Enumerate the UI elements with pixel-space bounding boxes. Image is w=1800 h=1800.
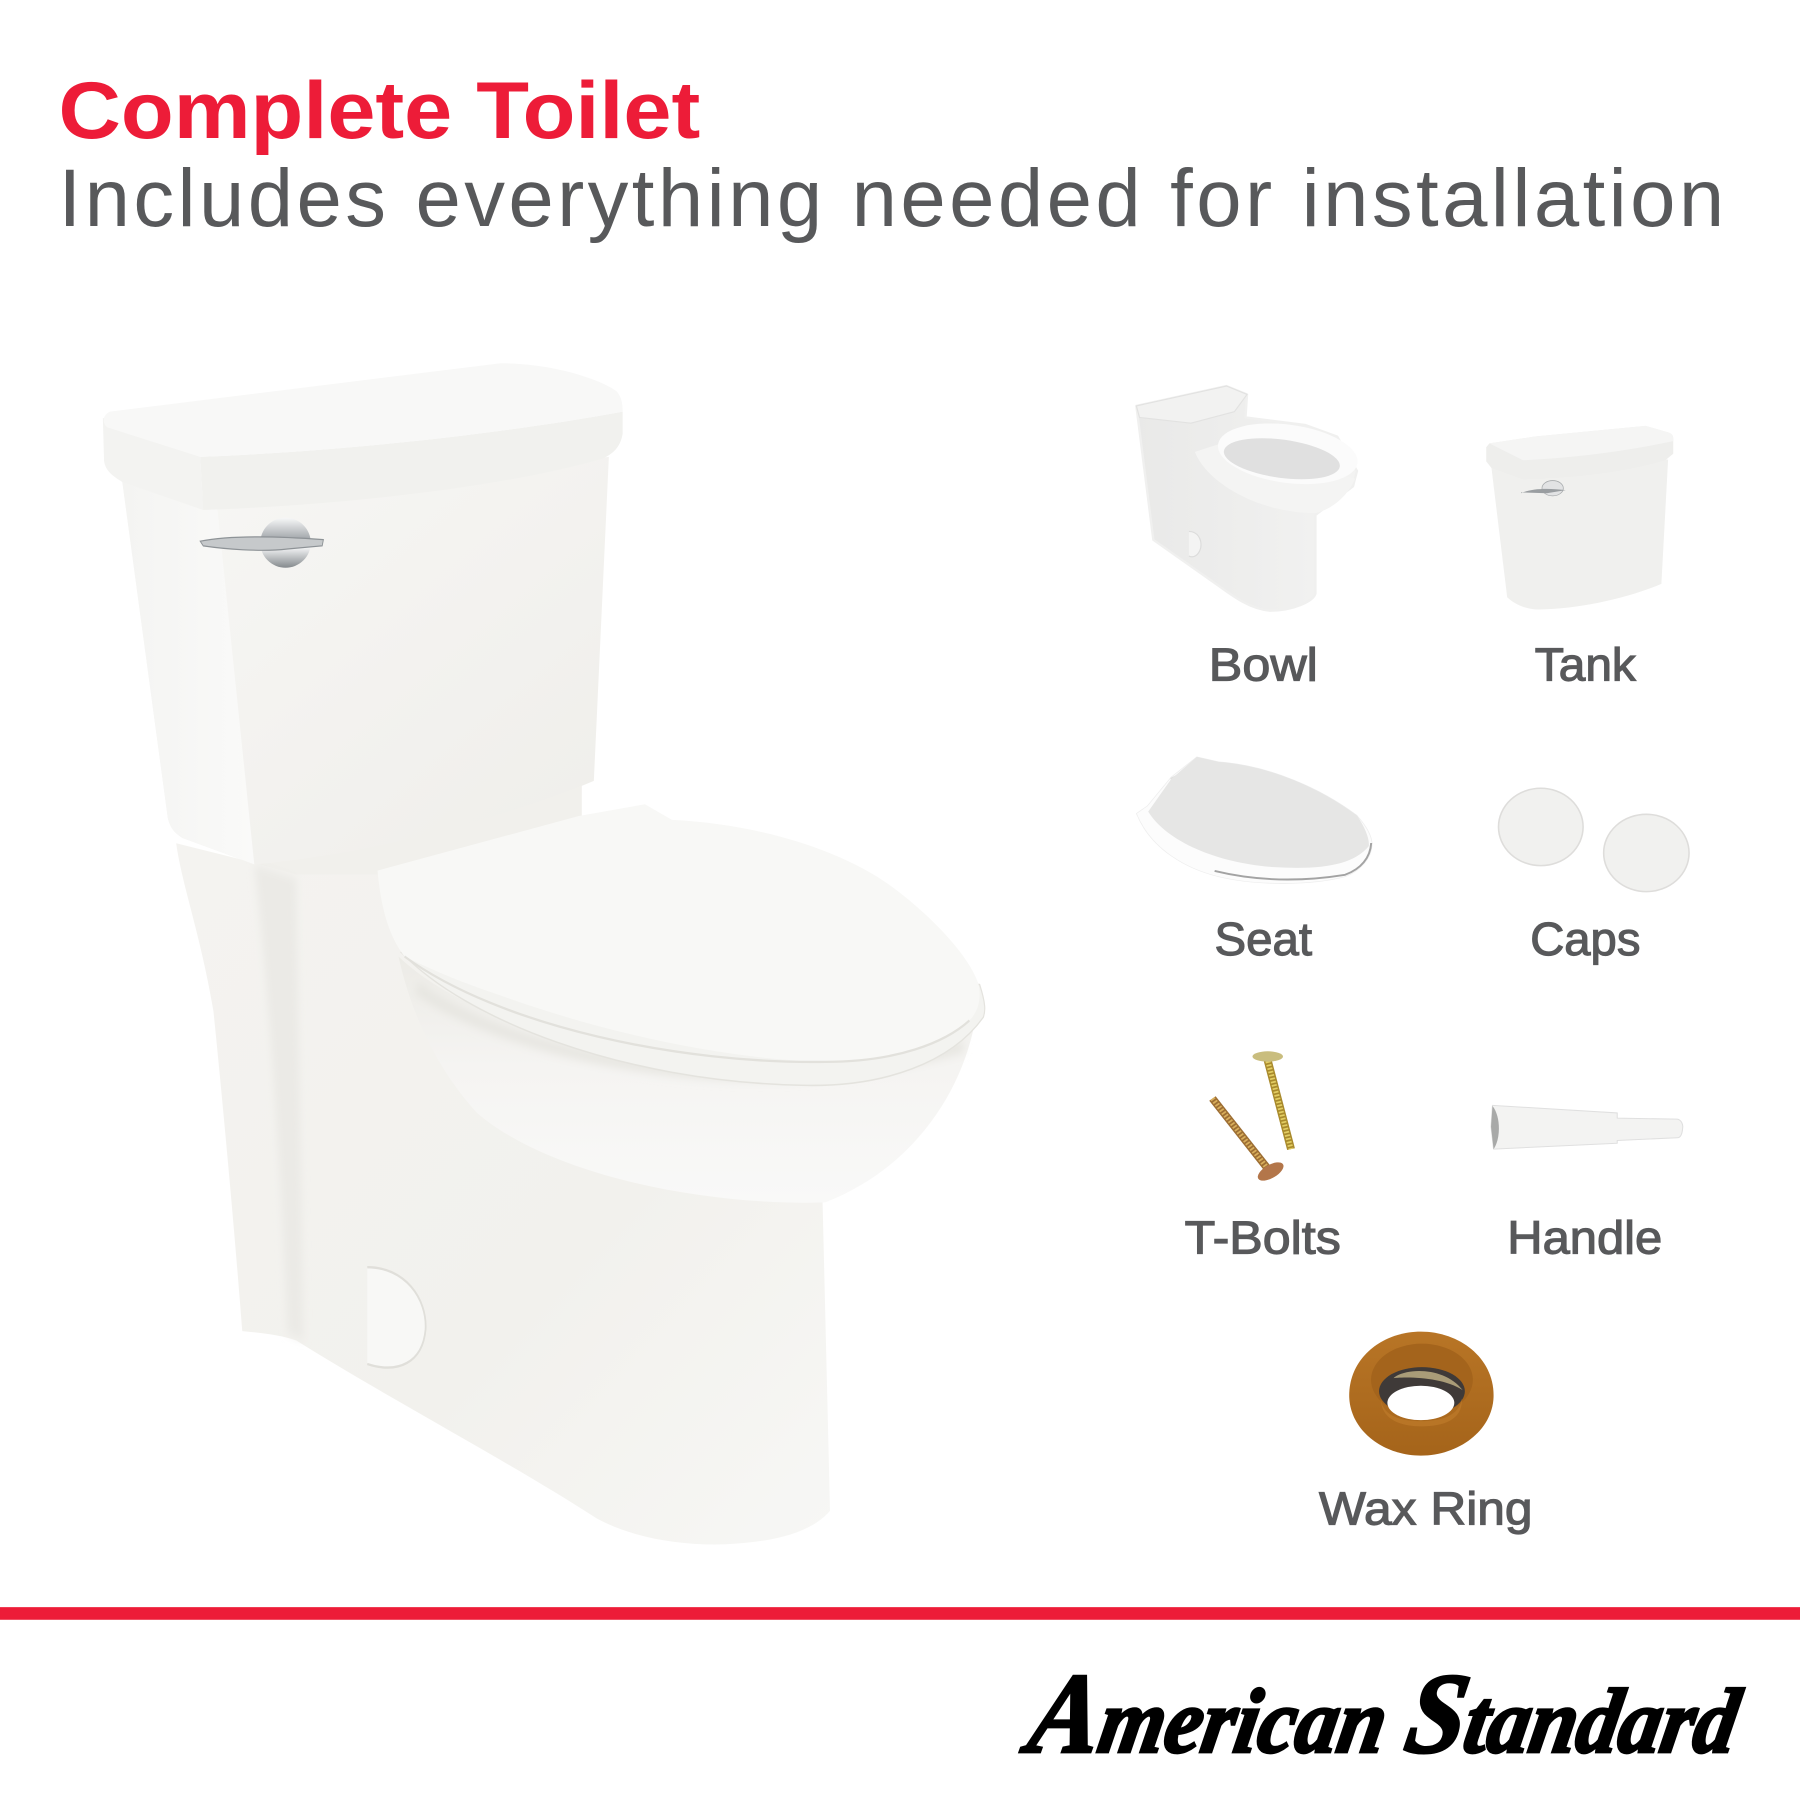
part: seat — [1136, 757, 1372, 883]
cap two — [1604, 814, 1689, 892]
bowl rim — [1214, 415, 1362, 492]
label: handle: Handle — [1507, 1212, 1662, 1264]
flange highlight — [1394, 1371, 1463, 1390]
brass bolt — [1252, 1051, 1291, 1149]
label: wax ring: Wax Ring — [1319, 1482, 1533, 1534]
part: wax ring — [1349, 1332, 1494, 1456]
tank body — [122, 457, 609, 864]
tank side — [122, 480, 254, 864]
ring body — [1349, 1332, 1494, 1456]
handle end — [1491, 1106, 1499, 1149]
bowl underside — [1195, 444, 1355, 513]
part: t-bolts — [1212, 1051, 1291, 1184]
copper bolt — [1212, 1098, 1287, 1184]
seat top — [1148, 757, 1369, 868]
metal flange — [1379, 1367, 1465, 1415]
seat lid edge — [405, 956, 969, 1062]
seat lid — [377, 804, 980, 1062]
bowl — [399, 956, 975, 1203]
bowl body — [1136, 386, 1357, 611]
label: caps: Caps — [1530, 913, 1640, 965]
seat base — [1136, 757, 1372, 883]
ring recess — [1371, 1344, 1473, 1416]
handle shaft — [1491, 1105, 1683, 1149]
title: Complete Toilet — [59, 66, 700, 156]
logo: American Standard: American Standard — [1015, 1651, 1752, 1778]
tank lid top — [104, 363, 623, 457]
tank lid side — [103, 418, 203, 510]
footer rule — [0, 1607, 1800, 1620]
label: tank: Tank — [1535, 639, 1637, 691]
seat edge — [1215, 843, 1371, 879]
flush handle — [200, 518, 323, 568]
bowl deck — [1136, 386, 1247, 423]
tank body — [1491, 460, 1668, 610]
deck behind seat — [254, 777, 582, 875]
part: handle — [1491, 1105, 1683, 1149]
pedestal and base — [176, 843, 830, 1544]
bowl shadow under seat — [417, 988, 963, 1075]
tank handle — [1521, 481, 1566, 496]
bowl opening — [1221, 432, 1343, 486]
column shading — [254, 864, 304, 1341]
subtitle: Includes everything needed for installation — [59, 153, 1724, 244]
tank lid — [1486, 426, 1673, 479]
tank lid top — [1489, 426, 1673, 460]
part: bowl — [1136, 386, 1362, 611]
label: seat: Seat — [1215, 913, 1312, 965]
tank lid front — [200, 412, 623, 510]
seat ring — [402, 949, 985, 1085]
seat hinge — [1170, 773, 1184, 787]
part: caps — [1498, 788, 1689, 892]
part: tank — [1486, 426, 1673, 610]
main toilet illustration — [103, 363, 985, 1544]
bowl cap — [1189, 531, 1201, 557]
ring hole — [1387, 1386, 1454, 1420]
label: t-bolts: T-Bolts — [1185, 1212, 1341, 1264]
ring lower face — [1381, 1399, 1462, 1426]
drain cap — [367, 1267, 426, 1368]
label: bowl: Bowl — [1209, 639, 1318, 691]
cap one — [1498, 788, 1583, 866]
